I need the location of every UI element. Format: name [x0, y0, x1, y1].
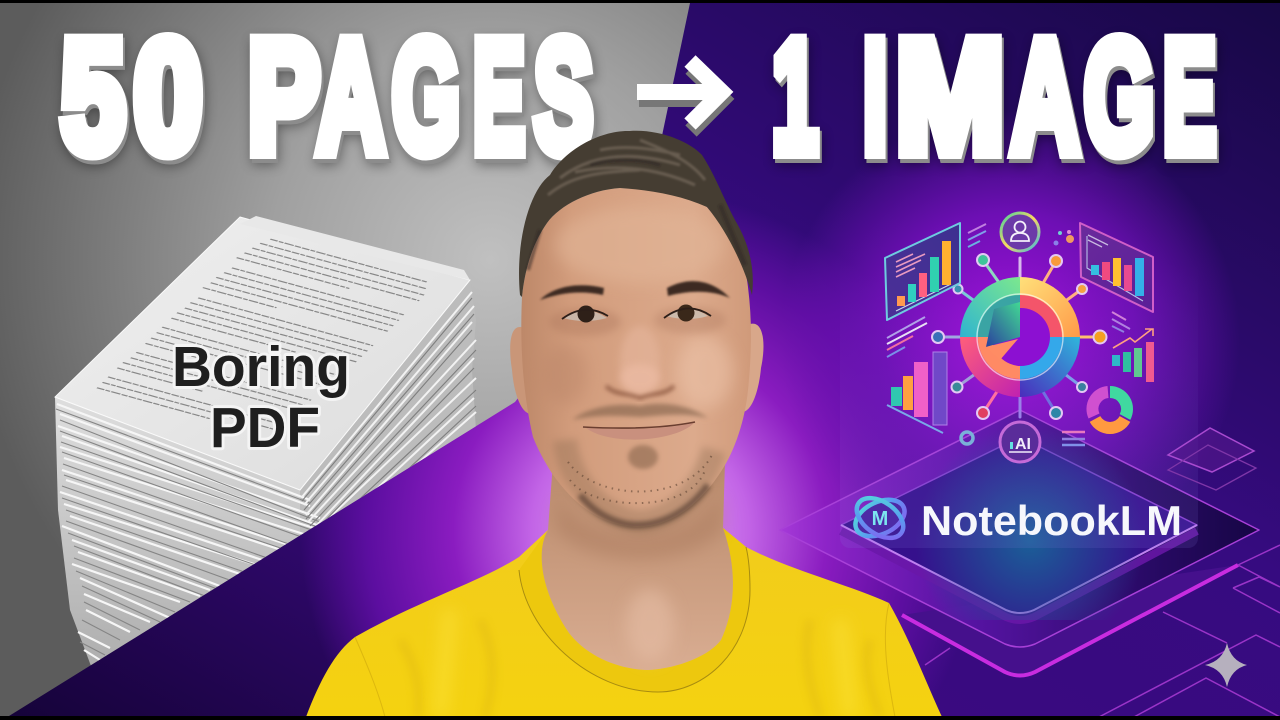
decorative text lines: [887, 224, 1130, 357]
title extrusion: I: [865, 11, 889, 189]
stack left face: [55, 398, 300, 666]
title extrusion: G: [1086, 11, 1156, 189]
translucent glass panel: [840, 260, 1198, 548]
title soft shadow: I: [865, 13, 889, 191]
title extrusion: A: [1013, 11, 1081, 189]
eyebrows: [540, 281, 730, 300]
small dots: [1054, 230, 1074, 246]
title face: 0: [134, 7, 202, 185]
top user badge: [1001, 213, 1039, 251]
logo icon: [850, 490, 910, 546]
left eye: [562, 306, 608, 322]
right dashboard panel: [1080, 223, 1153, 312]
title face: P: [248, 7, 320, 185]
spokes and nodes: [932, 254, 1106, 419]
printed text lines on sheet: [97, 235, 436, 438]
page edges on left face: [57, 404, 320, 660]
top sheet: [55, 217, 470, 490]
nose: [606, 364, 674, 398]
title soft shadow: 1: [774, 13, 820, 191]
title soft shadow: E: [475, 13, 527, 191]
title soft shadow: [63, 13, 1218, 191]
arrow shadow: [639, 68, 723, 131]
yellow shirt: [306, 528, 942, 717]
title face: S: [534, 7, 593, 185]
title extrusion: M: [898, 11, 1006, 189]
title face: G: [1084, 7, 1154, 185]
arrow: [637, 61, 722, 124]
title soft shadow: 5: [63, 13, 127, 191]
title extrusion: E: [475, 11, 527, 189]
right eye: [664, 304, 711, 322]
title face: A: [1011, 7, 1079, 185]
title face: G: [392, 7, 460, 185]
title extrusion: 1: [774, 11, 820, 189]
thumbnail scene: E: [1165, 11, 1218, 189]
moustache: [572, 404, 708, 420]
central donut: [960, 277, 1080, 397]
shirt collar band: [519, 528, 750, 692]
title extrusion: S: [536, 11, 595, 189]
title: 50 PAGES -> 1 IMAGE: [61, 7, 1218, 191]
small ring: [961, 432, 973, 444]
logo wordmark: NotebookLM: [921, 497, 1182, 544]
title face: [61, 7, 1216, 185]
hair texture: [528, 140, 745, 270]
bottom AI badge: AI: [1015, 436, 1031, 453]
title: 50 PAGES -> 1 IMAGE: E: [1163, 7, 1216, 185]
beard stubble: [565, 440, 714, 525]
label: Boring PDF: PDF: [210, 396, 320, 460]
ears: [510, 324, 763, 414]
bottom AI badge: [1000, 422, 1040, 462]
title extrusion: A: [319, 11, 387, 189]
left dashboard panel: [885, 223, 960, 320]
legend lines: [1062, 432, 1085, 445]
mouth: [583, 422, 695, 440]
face: [521, 188, 751, 527]
small donut chart: [1092, 392, 1127, 428]
sparkle icon: [1205, 643, 1247, 687]
title face: 5: [61, 7, 125, 185]
title face: A: [317, 7, 385, 185]
person: [306, 131, 942, 717]
page edges on right face: [302, 292, 476, 540]
paper stack: [55, 216, 476, 700]
chart cluster: [885, 213, 1154, 462]
label: Boring PDF: [172, 335, 350, 460]
thumbnail scene: E: [1165, 13, 1218, 191]
title extrusion: [63, 11, 1218, 189]
title extrusion: P: [250, 11, 322, 189]
neon isometric platform: [780, 410, 1280, 717]
title soft shadow: G: [1086, 13, 1156, 191]
label: Boring PDF: Boring: [172, 335, 350, 399]
neck: [542, 462, 733, 670]
stack right face: [300, 323, 476, 536]
title soft shadow: 0: [136, 13, 204, 191]
title extrusion: 5: [63, 11, 127, 189]
title face: 1: [772, 7, 818, 185]
hair: [519, 131, 753, 297]
title soft shadow: A: [1013, 13, 1081, 191]
title extrusion: G: [394, 11, 462, 189]
title soft shadow: M: [898, 13, 1006, 191]
right bar chart with arrow: [1112, 329, 1154, 382]
floating diamonds: [1168, 428, 1256, 490]
neck shading: [556, 495, 722, 661]
NotebookLM logo: [850, 490, 1182, 546]
title extrusion: 0: [136, 11, 204, 189]
title soft shadow: G: [394, 13, 462, 191]
left bar chart: [887, 352, 947, 433]
title face: I: [863, 7, 887, 185]
background grid lines: [925, 545, 1280, 717]
title face: E: [473, 7, 525, 185]
title soft shadow: A: [319, 13, 387, 191]
title soft shadow: P: [250, 13, 322, 191]
logo icon: M: [872, 508, 888, 530]
gray background with diagonal split: [0, 3, 690, 716]
title face: M: [896, 7, 1004, 185]
face highlights and shadows: [543, 207, 733, 408]
title soft shadow: S: [536, 13, 595, 191]
